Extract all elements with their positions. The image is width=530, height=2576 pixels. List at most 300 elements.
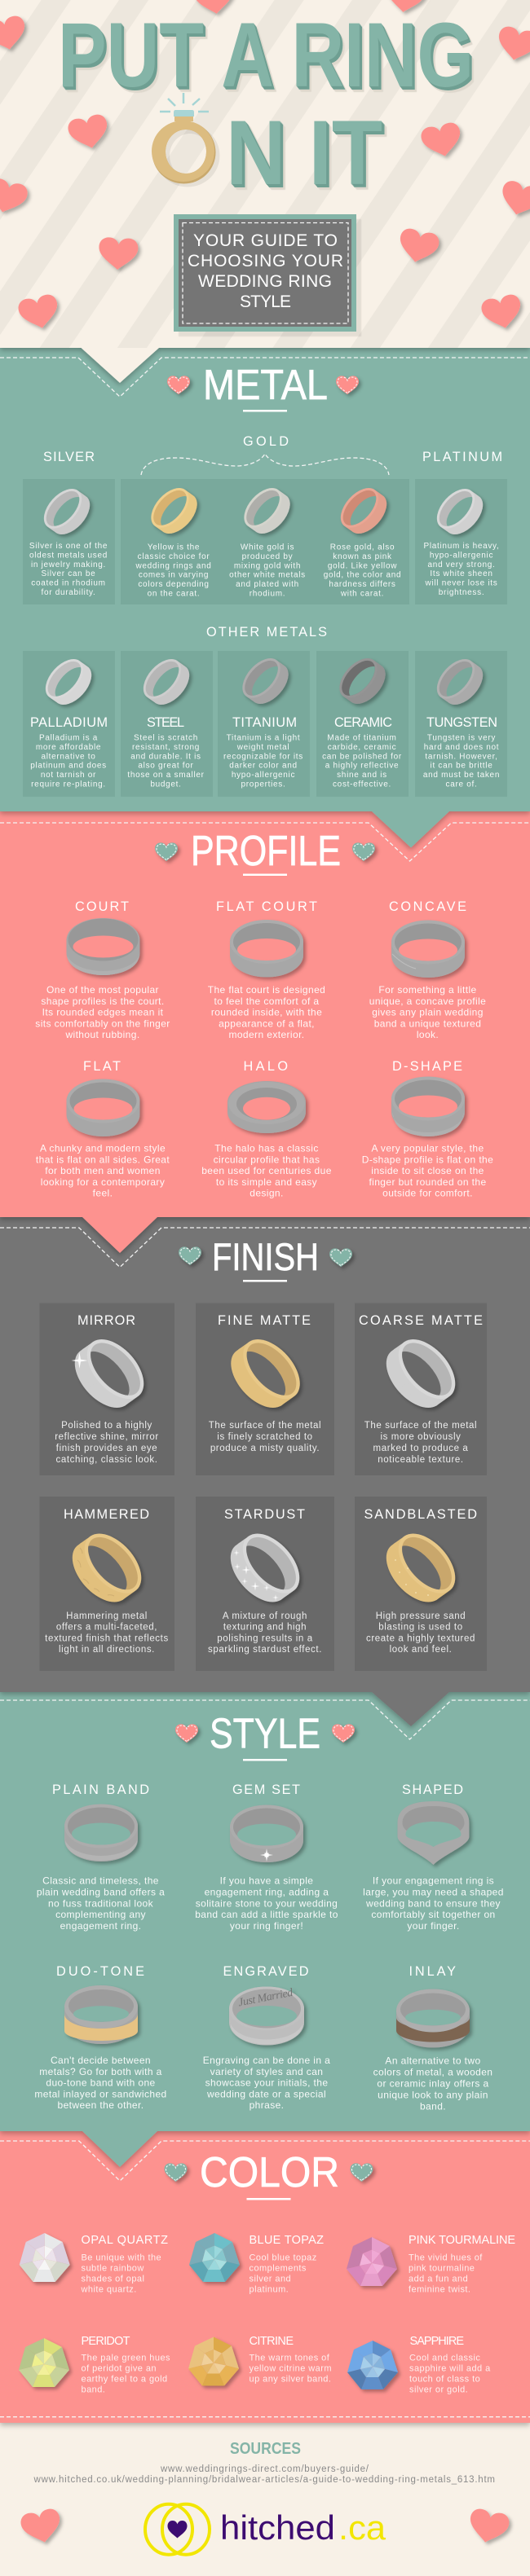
panel: hammered: textured finish that reflects xyxy=(45,1633,169,1643)
item: inlay: An alternative to two xyxy=(385,2055,481,2067)
panel: mirror: MIRROR xyxy=(77,1313,135,1328)
panel: hammered: offers a multi-faceted, xyxy=(56,1623,157,1633)
panel: sandblasted: look and feel. xyxy=(390,1645,452,1655)
panel: palladium: not tarnish or xyxy=(41,771,96,780)
panel: silver: Silver is one of the xyxy=(29,542,108,551)
panel: ceramic: cost-effective. xyxy=(333,780,391,789)
item: d-shape: D-shape profile is flat on the xyxy=(362,1154,493,1165)
panel: palladium xyxy=(23,651,115,797)
text: yellow gold: Yellow is the xyxy=(148,543,200,552)
panel: platinum: hypo-allergenic xyxy=(430,551,493,560)
ring: sandblasted xyxy=(375,1523,466,1612)
item: engraved: phrase. xyxy=(250,2099,284,2111)
color section background xyxy=(0,2118,530,2423)
item: citrine: CITRINE xyxy=(250,2335,294,2348)
ring: platinum xyxy=(430,481,490,542)
sparkles xyxy=(233,1550,279,1601)
item: flat court: appearance of a flat, xyxy=(219,1018,315,1029)
item: gem set: engagement ring, adding a xyxy=(205,1887,329,1898)
item: duo-tone: duo-tone band with one xyxy=(46,2077,156,2089)
item: plain band: no fuss traditional look xyxy=(48,1897,154,1909)
heading: profile: PROFILE xyxy=(191,828,341,875)
label: other metals: OTHER METALS xyxy=(206,625,327,640)
panel: stardust: polishing results in a xyxy=(217,1633,313,1643)
panel: mirror: finish provides an eye xyxy=(56,1444,157,1453)
item: flat xyxy=(36,1059,170,1199)
ring: engraved xyxy=(229,1986,304,2045)
ring: stardust xyxy=(219,1523,311,1612)
item: flat: for both men and women xyxy=(45,1165,161,1176)
item: duo-tone: between the other. xyxy=(58,2099,144,2111)
logo: hitched.ca: .ca xyxy=(338,2508,386,2547)
panel: coarse matte: The surface of the metal xyxy=(364,1421,477,1431)
item: d-shape: A very popular style, the xyxy=(371,1142,484,1154)
panel: titanium: Titanium is a light xyxy=(227,733,300,743)
text: rose gold: gold. Like yellow xyxy=(328,561,397,570)
subtitle box: WEDDING RING xyxy=(198,272,332,291)
panel: steel: Steel is scratch xyxy=(134,733,198,743)
striped backdrop xyxy=(0,0,530,348)
item: shaped: SHAPED xyxy=(402,1783,463,1797)
item: flat court: modern exterior. xyxy=(228,1029,305,1040)
item: flat: looking for a contemporary xyxy=(41,1176,165,1188)
panel: sandblasted: create a highly textured xyxy=(366,1633,475,1643)
gem: pink tourmaline xyxy=(347,2237,397,2286)
ring: palladium xyxy=(38,652,99,712)
panel: silver: Silver can be xyxy=(42,569,95,578)
stitching xyxy=(0,1700,530,1739)
panel: platinum: Its white sheen xyxy=(430,569,493,578)
item: concave: look. xyxy=(417,1029,439,1040)
item: plain band: Classic and timeless, the xyxy=(42,1875,159,1887)
title line two: N IT xyxy=(226,102,382,204)
ring: mirror xyxy=(64,1329,155,1418)
item: engraved: showcase your initials, the xyxy=(205,2077,328,2089)
item: court: COURT xyxy=(75,899,129,914)
item: blue topaz: Cool blue topaz xyxy=(250,2253,317,2263)
item: flat: that is flat on all sides. Great xyxy=(36,1154,170,1165)
hero background xyxy=(0,0,530,383)
item: peridot: of peridot give an xyxy=(82,2363,157,2373)
ring: gem set xyxy=(230,1805,303,1862)
heading: color xyxy=(165,2149,373,2200)
item: court: without rubbing. xyxy=(64,1029,140,1040)
panel: stardust: A mixture of rough xyxy=(223,1611,307,1621)
heading: metal xyxy=(167,362,359,412)
panel: fine matte: produce a misty quality. xyxy=(210,1444,320,1453)
panel: coarse matte: is more obviously xyxy=(380,1432,462,1442)
text: white gold: White gold is xyxy=(241,543,294,552)
panel: coarse matte: noticeable texture. xyxy=(378,1455,464,1465)
panel: palladium: alternative to xyxy=(41,752,96,761)
panel: hammered: light in all directions. xyxy=(59,1645,155,1655)
gold brace xyxy=(141,454,389,475)
gem: citrine xyxy=(188,2336,239,2385)
text: white gold: other white metals xyxy=(229,571,306,580)
item: concave: band a unique textured xyxy=(374,1018,481,1029)
item: shaped: If your engagement ring is xyxy=(373,1875,494,1887)
item: duo-tone: Can't decide between xyxy=(51,2055,151,2066)
icon: footer hearts xyxy=(19,2507,511,2547)
panel: steel: those on a smaller xyxy=(127,771,205,780)
item: court: sits comfortably on the finger xyxy=(35,1018,170,1029)
ring: silver xyxy=(37,481,97,542)
panel: palladium: Palladium is a xyxy=(39,733,98,743)
label: gold: GOLD xyxy=(243,434,289,449)
item: flat court: to feel the comfort of a xyxy=(214,996,320,1007)
item: engraved: ENGRAVED xyxy=(223,1964,308,1979)
panel: palladium: more affordable xyxy=(36,743,101,752)
item: opal quartz: subtle rainbow xyxy=(82,2264,144,2274)
item: shaped: large, you may need a shaped xyxy=(363,1887,504,1898)
ring: plain band xyxy=(64,1804,138,1862)
stitching xyxy=(0,358,530,397)
label: platinum: PLATINUM xyxy=(422,450,502,464)
panel: platinum: and very strong. xyxy=(428,560,495,569)
panel: sandblasted xyxy=(355,1497,487,1671)
item: plain band: engagement ring. xyxy=(60,1920,141,1932)
panel: coarse matte: COARSE MATTE xyxy=(359,1313,483,1328)
item: peridot: band. xyxy=(82,2385,105,2394)
section: metal xyxy=(0,358,530,797)
item: sapphire: sapphire will add a xyxy=(409,2363,491,2373)
panel: platinum: brightness. xyxy=(439,588,484,597)
sand dots xyxy=(395,1559,429,1596)
stitching xyxy=(0,823,530,861)
item: pink tourmaline: feminine twist. xyxy=(409,2285,470,2295)
footer xyxy=(19,2440,511,2555)
item: court: Its rounded edges mean it xyxy=(42,1007,164,1018)
item: engraved: Engraving can be done in a xyxy=(203,2055,330,2066)
gem: sapphire xyxy=(347,2341,398,2389)
text: rose gold: gold, the color and xyxy=(324,571,401,580)
item: d-shape: D-SHAPE xyxy=(392,1059,462,1074)
panel: silver: oldest metals used xyxy=(29,551,108,560)
item: blue topaz: platinum. xyxy=(250,2285,289,2295)
stitching xyxy=(0,2141,530,2181)
item: shaped: wedding band to ensure they xyxy=(365,1897,501,1909)
item: citrine: yellow citrine warm xyxy=(250,2363,332,2373)
item: blue topaz xyxy=(189,2233,324,2295)
panel: titanium: hypo-allergenic xyxy=(232,771,295,780)
panel: coarse matte: marked to produce a xyxy=(373,1444,468,1453)
panel: ceramic: can be polished for xyxy=(322,752,402,761)
heading: finish: FINISH xyxy=(212,1235,319,1278)
subtitle box: STYLE xyxy=(240,292,291,311)
text: rose gold: hardness differs xyxy=(329,580,396,589)
panel: stardust xyxy=(196,1497,334,1671)
item: flat court: rounded inside, with the xyxy=(211,1007,322,1018)
item: gem set: band can add a little sparkle to xyxy=(195,1909,338,1920)
panel: palladium: PALLADIUM xyxy=(30,715,108,730)
ring: shaped xyxy=(398,1801,470,1865)
ring: titanium xyxy=(235,651,296,711)
item: gem set: your ring finger! xyxy=(230,1920,303,1932)
item: pink tourmaline: PINK TOURMALINE xyxy=(409,2234,515,2247)
text: white gold: produced by xyxy=(242,552,293,561)
subtitle box: YOUR GUIDE TO xyxy=(193,231,338,250)
item: d-shape: outside for comfort. xyxy=(382,1188,473,1199)
panel: steel: also great for xyxy=(138,762,194,771)
source links: www.hitched.co.uk/wedding-planning/bridalwear-articles/a-guide-to-wedding-ring-metals_613.htm xyxy=(33,2475,495,2485)
item: flat: FLAT xyxy=(83,1059,121,1074)
item: sapphire: Cool and classic xyxy=(409,2353,480,2363)
item: halo: to its simple and easy xyxy=(216,1176,317,1188)
item: plain band: complementing any xyxy=(55,1909,146,1920)
item: gem set: GEM SET xyxy=(232,1783,300,1797)
scattered hearts xyxy=(0,0,530,332)
ring: yellow gold xyxy=(144,481,205,541)
ring: duo-tone xyxy=(64,1985,138,2044)
item: halo: The halo has a classic xyxy=(214,1142,319,1154)
item: inlay: or ceramic inlay offers a xyxy=(377,2077,489,2089)
item: engraved xyxy=(203,1964,330,2111)
panel: sandblasted: blasting is used to xyxy=(378,1623,463,1633)
gem: blue topaz xyxy=(189,2233,240,2282)
footer background xyxy=(0,2363,530,2576)
panel: silver: for durability. xyxy=(41,588,96,597)
text: rose gold: Rose gold, also xyxy=(330,543,395,552)
item: halo xyxy=(201,1059,332,1199)
item: opal quartz: Be unique with the xyxy=(82,2253,161,2263)
panel: stardust: texturing and high xyxy=(223,1623,307,1633)
ring: rose gold xyxy=(333,481,394,541)
item: sapphire: silver or gold. xyxy=(409,2385,468,2394)
item: sapphire xyxy=(347,2335,491,2394)
engraving: Just Married xyxy=(237,1987,294,2009)
item: d-shape xyxy=(362,1059,493,1199)
label: silver: SILVER xyxy=(43,450,95,464)
sparkle xyxy=(72,1352,88,1369)
item: inlay: INLAY xyxy=(409,1964,456,1979)
item: flat: feel. xyxy=(93,1188,113,1199)
item: engraved: variety of styles and can xyxy=(210,2066,323,2077)
panel: titanium xyxy=(218,651,310,797)
item: duo-tone: metal inlayed or sandwiched xyxy=(34,2088,167,2099)
panel: sandblasted: SANDBLASTED xyxy=(364,1507,477,1522)
item: halo: been used for centuries due xyxy=(201,1165,332,1176)
panel: tungsten: Tungsten is very xyxy=(427,733,496,743)
text: yellow gold: on the carat. xyxy=(148,590,200,598)
item: concave: CONCAVE xyxy=(389,899,466,914)
panel: palladium: platinum and does xyxy=(30,762,107,771)
item: citrine: The warm tones of xyxy=(250,2353,330,2363)
panel: platinum xyxy=(415,479,507,604)
heading: finish xyxy=(179,1235,352,1282)
solitaire gem xyxy=(260,1848,273,1862)
panel: sandblasted: High pressure sand xyxy=(376,1611,466,1621)
item: opal quartz: OPAL QUARTZ xyxy=(82,2234,168,2247)
profile section background xyxy=(0,798,530,1253)
panel: mirror: Polished to a highly xyxy=(61,1421,152,1431)
heading: style: STYLE xyxy=(210,1711,320,1758)
hammer marks xyxy=(77,1548,114,1596)
item: court: shape profiles is the court. xyxy=(41,996,165,1007)
subtitle box: CHOOSING YOUR xyxy=(188,252,343,270)
item: concave xyxy=(369,899,486,1040)
panel: stardust: STARDUST xyxy=(224,1507,305,1522)
panel: mirror: catching, classic look. xyxy=(55,1455,158,1465)
text: yellow gold: comes in varying xyxy=(139,571,209,580)
item: flat court: The flat court is designed xyxy=(208,984,325,996)
metal section background xyxy=(0,342,530,847)
ring: hammered xyxy=(61,1523,152,1612)
ring: white gold xyxy=(236,481,298,541)
panel: titanium: properties. xyxy=(241,780,285,789)
text: white gold: rhodium. xyxy=(250,590,285,598)
item: peridot: PERIDOT xyxy=(82,2335,130,2348)
item: peridot: earthy feel to a gold xyxy=(82,2374,168,2384)
panel: titanium: recognizable for its xyxy=(223,752,303,761)
panel: ceramic: CERAMIC xyxy=(334,715,392,730)
text: yellow gold: colors depending xyxy=(138,580,210,589)
panel: steel: STEEL xyxy=(147,715,184,730)
source links xyxy=(33,2464,495,2485)
item: inlay: colors of metal, a wooden xyxy=(373,2067,492,2078)
item: concave: unique, a concave profile xyxy=(369,996,486,1007)
item: opal quartz: shades of opal xyxy=(82,2275,144,2284)
panel: fine matte: The surface of the metal xyxy=(209,1421,321,1431)
panel: tungsten: and must be taken xyxy=(423,771,500,780)
item: flat: A chunky and modern style xyxy=(40,1142,166,1154)
item: pink tourmaline: The vivid hues of xyxy=(409,2253,483,2263)
panel: tungsten: it can be brittle xyxy=(431,762,492,771)
hero header xyxy=(0,0,530,348)
panel: ceramic xyxy=(316,651,409,797)
text: yellow gold: wedding rings and xyxy=(135,561,212,570)
panel: fine matte: is finely scratched to xyxy=(217,1432,313,1442)
ring: inlay xyxy=(396,1989,470,2048)
ring: coarse matte xyxy=(375,1329,466,1418)
panel: tungsten: TUNGSTEN xyxy=(426,715,497,730)
item: shaped: your finger. xyxy=(407,1920,460,1932)
panel: platinum: will never lose its xyxy=(425,579,497,588)
panel: silver: coated in rhodium xyxy=(31,579,106,588)
section: style xyxy=(0,1700,530,2112)
panel: hammered: Hammering metal xyxy=(66,1611,148,1621)
ring: flat court xyxy=(230,920,303,978)
panel: coarse matte xyxy=(355,1303,487,1475)
item: gem set xyxy=(195,1783,338,1932)
logo: hitched.ca xyxy=(145,2504,386,2555)
item: plain band: plain wedding band offers a xyxy=(37,1887,165,1898)
panel: tungsten xyxy=(415,651,507,797)
panel: steel xyxy=(121,651,213,797)
panel: mirror: reflective shine, mirror xyxy=(55,1432,159,1442)
panel: ceramic: shine and is xyxy=(337,771,387,780)
logo: hitched.ca: hitched xyxy=(220,2508,335,2547)
style section background xyxy=(0,1678,530,2167)
item: concave: gives any plain wedding xyxy=(372,1007,484,1018)
text: rose gold: with carat. xyxy=(340,590,384,598)
panel: titanium: weight metal xyxy=(236,743,289,752)
panel: stardust: sparkling stardust effect. xyxy=(208,1645,322,1655)
item: d-shape: finger but rounded on the xyxy=(369,1176,487,1188)
panel: silver xyxy=(23,479,115,604)
panel: hammered: HAMMERED xyxy=(64,1507,149,1522)
item: concave: For something a little xyxy=(378,984,477,996)
item: blue topaz: silver and xyxy=(250,2275,291,2284)
gem: peridot xyxy=(19,2338,69,2387)
panel: titanium: darker color and xyxy=(229,762,298,771)
bottom stitching xyxy=(0,2416,530,2418)
section: finish xyxy=(0,1228,530,1671)
item: court: One of the most popular xyxy=(46,984,159,996)
item: flat court: FLAT COURT xyxy=(216,899,317,914)
finish section background xyxy=(0,1206,530,1726)
section: profile xyxy=(0,823,530,1199)
panel: tungsten: hard and does not xyxy=(424,743,499,752)
ring: court xyxy=(67,918,140,975)
item: duo-tone: DUO-TONE xyxy=(56,1964,144,1979)
item: duo-tone xyxy=(34,1964,167,2111)
item: halo: circular profile that has xyxy=(214,1154,320,1165)
panel: steel: resistant, strong xyxy=(132,743,200,752)
item: duo-tone: metals? Go for both with a xyxy=(39,2066,162,2077)
item: citrine xyxy=(188,2335,332,2385)
heading: color: COLOR xyxy=(200,2149,339,2196)
ring: steel xyxy=(136,652,197,712)
panel: fine matte xyxy=(196,1303,334,1475)
icon: gold ring as the letter O xyxy=(152,93,220,187)
ring: flat xyxy=(67,1079,140,1136)
item: d-shape: inside to sit close on the xyxy=(371,1165,484,1176)
item: halo: HALO xyxy=(243,1059,288,1074)
ring: tungsten xyxy=(430,652,490,712)
text: yellow gold: classic choice for xyxy=(138,552,210,561)
ring: d-shape xyxy=(391,1077,465,1136)
ring: ceramic xyxy=(332,651,393,711)
heading: metal: METAL xyxy=(203,362,328,409)
item: engraved: wedding date or a special xyxy=(206,2088,326,2099)
item: gem set: solitaire stone to your wedding xyxy=(196,1897,338,1909)
panel: mirror xyxy=(39,1303,174,1475)
gem: opal quartz xyxy=(20,2233,70,2282)
text: white gold: and plated with xyxy=(236,580,299,589)
item: opal quartz xyxy=(20,2233,168,2295)
panel: silver: in jewelry making. xyxy=(31,560,106,569)
panel: titanium: TITANIUM xyxy=(232,715,297,730)
panel: hammered xyxy=(39,1497,174,1671)
panel: ceramic: Made of titanium xyxy=(327,733,397,743)
panel: steel: and durable. It is xyxy=(130,752,201,761)
panel: fine matte: FINE MATTE xyxy=(218,1313,311,1328)
item: gem set: If you have a simple xyxy=(220,1875,313,1887)
item: court xyxy=(35,899,170,1040)
item: citrine: up any silver band. xyxy=(250,2374,331,2384)
item: peridot: The pale green hues xyxy=(82,2353,170,2363)
item: opal quartz: white quartz. xyxy=(80,2285,137,2295)
item: inlay: band. xyxy=(420,2100,446,2112)
item: peridot xyxy=(19,2335,170,2394)
ring: fine matte xyxy=(220,1329,311,1418)
panel: steel: budget. xyxy=(150,780,182,789)
item: blue topaz: BLUE TOPAZ xyxy=(250,2234,324,2247)
panel: palladium: require re-plating. xyxy=(31,780,106,789)
panel: tungsten: tarnish. However, xyxy=(425,752,498,761)
text: rose gold: known as pink xyxy=(333,552,392,561)
text: white gold: mixing gold with xyxy=(234,561,301,570)
item: shaped xyxy=(363,1783,504,1932)
item: inlay: unique look to any plain xyxy=(378,2089,488,2100)
item: plain band xyxy=(37,1783,165,1932)
sources heading: SOURCES xyxy=(230,2440,301,2458)
item: pink tourmaline xyxy=(347,2234,515,2295)
item: inlay xyxy=(373,1964,492,2112)
item: pink tourmaline: add a fun and xyxy=(409,2275,468,2284)
panel: ceramic: carbide, ceramic xyxy=(328,743,396,752)
item: plain band: PLAIN BAND xyxy=(52,1783,149,1797)
